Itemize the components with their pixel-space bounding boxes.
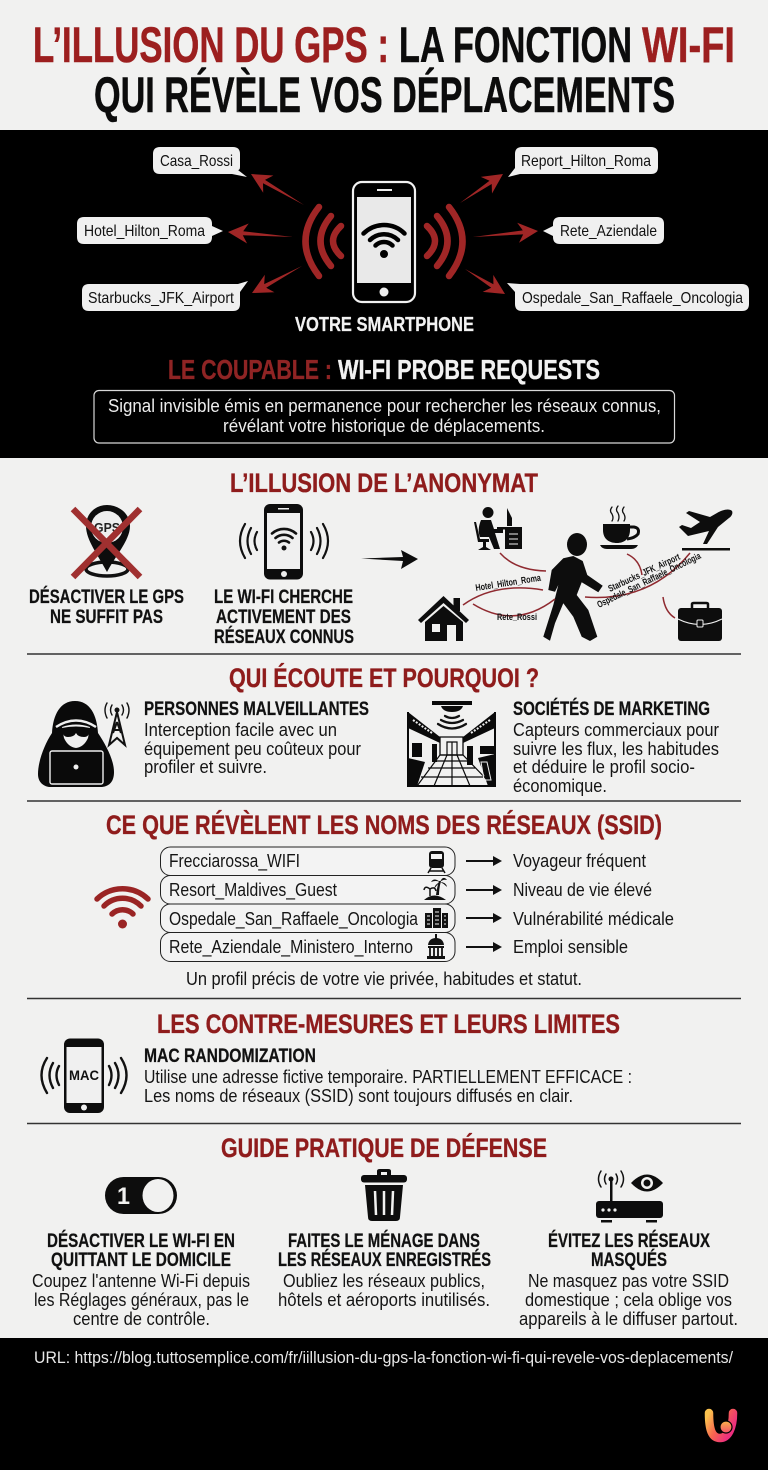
icon: train [428, 851, 445, 873]
text: le wi-fi cherche: LE WI-FI CHERCHE [214, 586, 353, 608]
panel: smartphone probe requests [0, 130, 768, 458]
text: sociétés de marketing: SOCIÉTÉS DE MARKETING [513, 697, 710, 720]
heading: le coupable: WI-FI PROBE REQUESTS [338, 354, 600, 385]
heading: le coupable [168, 354, 600, 385]
bubble: Report_Hilton_Roma: Report_Hilton_Roma [521, 153, 651, 170]
column: évitez les réseaux masqués: appareils à le diffuser partout. [519, 1309, 738, 1329]
row: Ospedale [160, 904, 674, 932]
row: Frecciarossa: Frecciarossa_WIFI [169, 851, 300, 872]
text: désactiver le GPS [29, 585, 184, 628]
column: faites le ménage: FAITES LE MÉNAGE DANS [288, 1229, 480, 1252]
icon: office worker [474, 507, 522, 550]
column: faites le ménage: Oubliez les réseaux publics, [283, 1271, 485, 1291]
icon: MAC phone: MAC [69, 1067, 99, 1083]
bubble: Starbucks_JFK_Airport: Starbucks_JFK_Airport [88, 290, 234, 307]
text: sociétés de marketing: économique. [513, 776, 607, 796]
heading: le coupable: LE COUPABLE : [168, 354, 332, 385]
panel: l'illusion de l'anonymat [29, 468, 732, 648]
text: MAC randomization: MAC RANDOMIZATION [144, 1045, 316, 1067]
icon: briefcase [678, 603, 722, 641]
column: désactiver le wi-fi: centre de contrôle. [73, 1309, 210, 1329]
text: sociétés de marketing: suivre les flux, les habitudes [513, 739, 719, 759]
column: désactiver le wi-fi: les Réglages généraux, pas le [34, 1290, 249, 1310]
column: désactiver le wi-fi: Coupez l'antenne Wi-Fi depuis [32, 1271, 250, 1291]
arrows: probe signals [228, 174, 538, 294]
text: désactiver le GPS: NE SUFFIT PAS [50, 606, 163, 628]
row: Rete Aziendale: Rete_Aziendale_Ministero_Interno [169, 937, 413, 958]
icon: GPS crossed out [73, 505, 140, 577]
icon: toggle [105, 1177, 177, 1214]
text: sociétés de marketing [513, 697, 719, 796]
title: L’ILLUSION DU GPS : [33, 17, 389, 73]
bubble: Rete_Aziendale [543, 217, 664, 244]
icon: trash bin [361, 1169, 407, 1221]
column: faites le ménage: hôtels et aéroports inutilisés. [278, 1290, 490, 1310]
bubble: Ospedale_San_Raffaele_Oncologia [507, 283, 749, 311]
text: le wi-fi cherche [214, 586, 354, 648]
column: évitez les réseaux masqués: ÉVITEZ LES RÉSEAUX [548, 1229, 710, 1252]
icon: walking person [543, 533, 603, 641]
icon: house [418, 596, 469, 641]
icon: router with eye [596, 1171, 663, 1222]
text: profil précis: Un profil précis de votre vie privée, habitudes et statut. [186, 969, 582, 989]
heading: L’ILLUSION DE L’ANONYMAT [230, 468, 538, 498]
title: WI-FI [642, 17, 735, 73]
row: Rete Aziendale [160, 932, 628, 962]
text: sociétés de marketing: Capteurs commerciaux pour [513, 720, 719, 740]
row: Resort Maldives [160, 876, 652, 904]
icon: coffee cup [600, 506, 638, 549]
row: Frecciarossa: Voyageur fréquent [513, 851, 646, 871]
text: personnes malveillantes: équipement peu coûteux pour [144, 739, 361, 759]
icon: red wifi [97, 889, 148, 928]
icon: mall with sensor [408, 701, 495, 786]
callout: signal invisible [94, 390, 674, 443]
heading: LES CONTRE-MESURES ET LEURS LIMITES [157, 1009, 620, 1039]
bubble: Rete_Aziendale: Rete_Aziendale [560, 223, 657, 240]
icon: airplane [679, 510, 732, 550]
column: évitez les réseaux masqués: MASQUÉS [591, 1248, 667, 1271]
network links: Ospedale_San_Raffaele_Oncologia [595, 551, 703, 611]
arrow [361, 550, 418, 569]
icon: logo [709, 1413, 733, 1438]
panel: qui écoute et pourquoi [38, 662, 719, 796]
row: Resort Maldives: Resort_Maldives_Guest [169, 880, 337, 901]
column: évitez les réseaux masqués: Ne masquez pas votre SSID [528, 1271, 729, 1291]
column: désactiver le wi-fi [32, 1229, 250, 1329]
icon: red signal waves [306, 207, 462, 276]
icon: phone with wifi [240, 504, 328, 580]
text: le wi-fi cherche: ACTIVEMENT DES [216, 606, 351, 628]
title: LA FONCTION [399, 17, 632, 73]
text: MAC randomization: Utilise une adresse fictive temporaire. PARTIELLEMENT EFFICACE : [144, 1067, 632, 1087]
row: Frecciarossa [160, 847, 646, 876]
row: Ospedale: Vulnérabilité médicale [513, 909, 674, 929]
panel: contre-mesures [42, 1009, 632, 1113]
panel: guide pratique [32, 1132, 738, 1329]
panel: noms des réseaux [97, 809, 674, 989]
network links: Hotel_Hilton_Roma [475, 573, 542, 594]
row: Ospedale: Ospedale_San_Raffaele_Oncologia [169, 909, 419, 930]
row: Rete Aziendale: Emploi sensible [513, 937, 628, 957]
heading: QUI ÉCOUTE ET POURQUOI ? [229, 662, 539, 693]
text: personnes malveillantes: PERSONNES MALVEILLANTES [144, 698, 369, 720]
text: MAC randomization: Les noms de réseaux (SSID) sont toujours diffusés en clair. [144, 1086, 573, 1106]
bubble: Casa_Rossi [153, 147, 247, 177]
icon: GPS crossed out: GPS [94, 520, 120, 535]
text: personnes malveillantes: profiler et suivre. [144, 757, 267, 777]
column: faites le ménage [278, 1229, 491, 1310]
bubble: Report_Hilton_Roma [508, 147, 658, 177]
text: personnes malveillantes [144, 698, 369, 777]
footer [0, 1338, 768, 1470]
network links [463, 551, 703, 623]
text: personnes malveillantes: Interception facile avec un [144, 720, 337, 740]
icon: hospital buildings [425, 908, 448, 928]
row: Resort Maldives: Niveau de vie élevé [513, 880, 652, 900]
icon: smartphone [353, 182, 415, 302]
icon: hacker [38, 701, 129, 787]
bubble: Starbucks_JFK_Airport [82, 281, 248, 311]
column: évitez les réseaux masqués: domestique ; cela oblige vos [525, 1290, 732, 1310]
network links: Starbucks_JFK_Airport [607, 552, 683, 595]
bubble: Hotel_Hilton_Roma: Hotel_Hilton_Roma [84, 223, 205, 240]
URL: URL: https://blog.tuttosemplice.com/fr/iillusion-du-gps-la-fonction-wi-fi-qui-revele-vos-deplacements/ [34, 1348, 733, 1367]
column: faites le ménage: LES RÉSEAUX ENREGISTRÉS [278, 1248, 491, 1271]
bubble: Hotel_Hilton_Roma [77, 217, 223, 244]
icon: toggle: 1 [117, 1183, 130, 1210]
text: MAC randomization [144, 1045, 632, 1106]
text: sociétés de marketing: et déduire le profil socio- [513, 757, 695, 777]
title [33, 17, 735, 123]
text: le wi-fi cherche: RÉSEAUX CONNUS [214, 625, 354, 648]
label: votre smartphone: VOTRE SMARTPHONE [295, 314, 474, 336]
icon: institution [427, 934, 445, 959]
callout: signal invisible: révélant votre historique de déplacements. [223, 416, 545, 436]
callout: signal invisible: Signal invisible émis en permanence pour rechercher les réseaux connus, [108, 396, 661, 416]
bubble: Casa_Rossi: Casa_Rossi [160, 153, 233, 170]
network links: Rete_Rossi [497, 612, 537, 623]
column: désactiver le wi-fi: QUITTANT LE DOMICILE [51, 1249, 231, 1271]
column: désactiver le wi-fi: DÉSACTIVER LE WI-FI EN [47, 1229, 235, 1252]
icon: palm trees [424, 878, 447, 900]
icon: MAC phone [42, 1038, 126, 1113]
heading: GUIDE PRATIQUE DE DÉFENSE [221, 1132, 547, 1163]
column: évitez les réseaux masqués [519, 1229, 738, 1329]
text: désactiver le GPS: DÉSACTIVER LE GPS [29, 585, 184, 608]
